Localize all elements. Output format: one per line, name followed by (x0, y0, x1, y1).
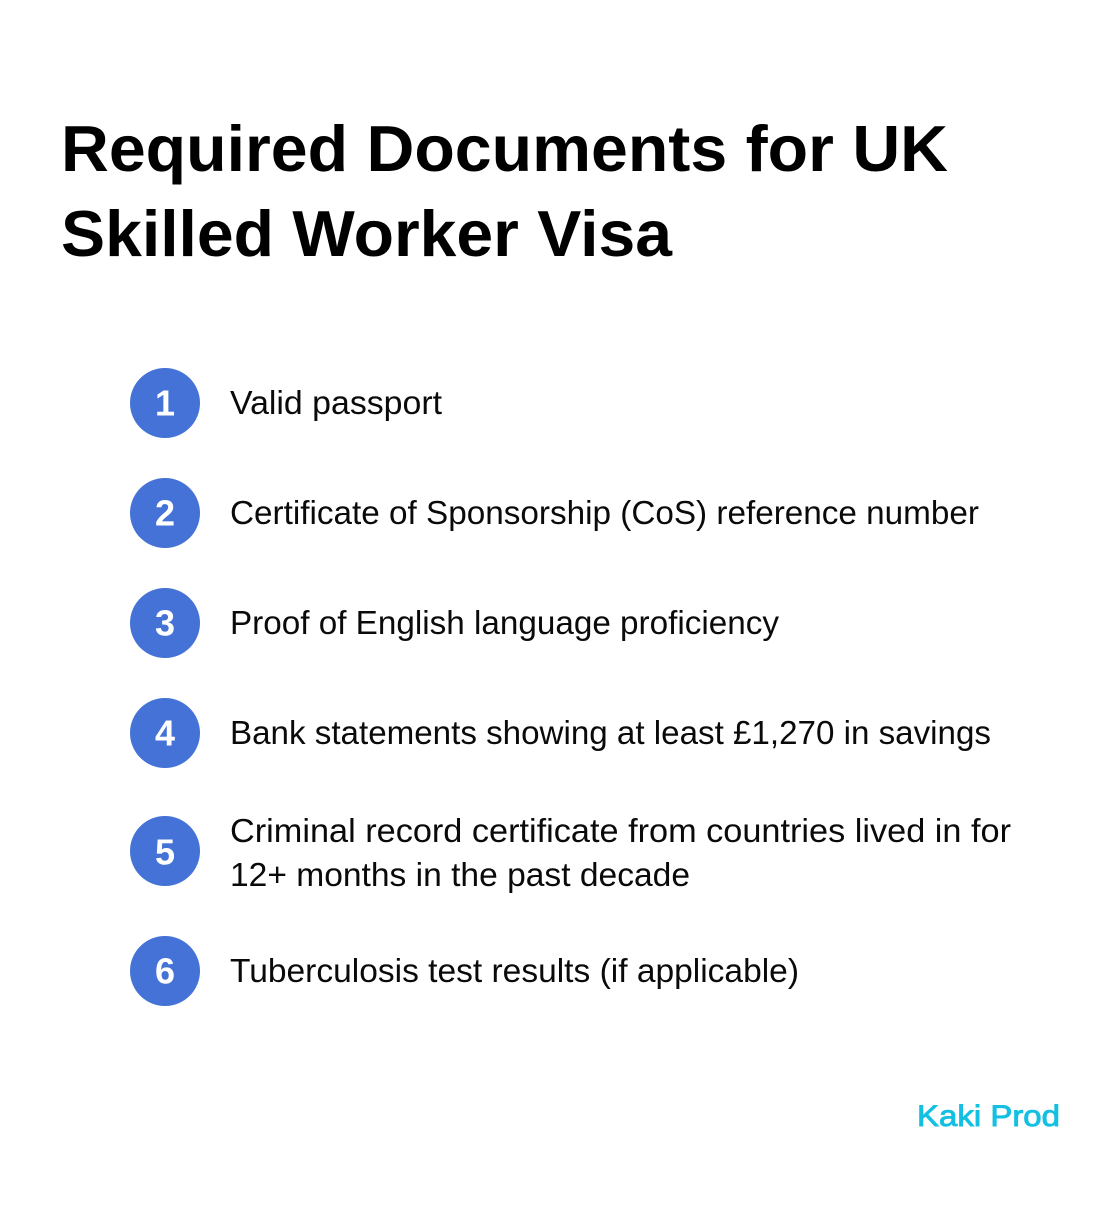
title (61, 112, 948, 270)
list item 6: 6 (155, 950, 175, 992)
list item 5: 12+ months in the past decade (230, 856, 690, 893)
list item 4: 4 (155, 712, 175, 754)
list item 2: 2 (155, 492, 175, 534)
list item 1: Valid passport (230, 384, 442, 421)
list item 1 (130, 368, 442, 438)
list item 1: 1 (155, 382, 175, 424)
list item 6: Tuberculosis test results (if applicable) (230, 952, 799, 989)
list item 5 (130, 812, 1011, 893)
list item 3: Proof of English language proficiency (230, 604, 779, 641)
list item 4: Bank statements showing at least £1,270 in savings (230, 714, 991, 751)
list item 3: 3 (155, 602, 175, 644)
list item 5: Criminal record certificate from countries lived in for (230, 812, 1011, 849)
list item 4 (130, 698, 991, 768)
list item 6 (130, 936, 799, 1006)
list item 3 (130, 588, 779, 658)
list item 2: Certificate of Sponsorship (CoS) reference number (230, 494, 979, 531)
list item 5: 5 (155, 832, 175, 872)
logo: Kaki Prod: Kaki Prod (917, 1100, 1060, 1133)
title: Skilled Worker Visa (61, 197, 673, 270)
title: Required Documents for UK (61, 112, 948, 185)
list item 2 (130, 478, 979, 548)
